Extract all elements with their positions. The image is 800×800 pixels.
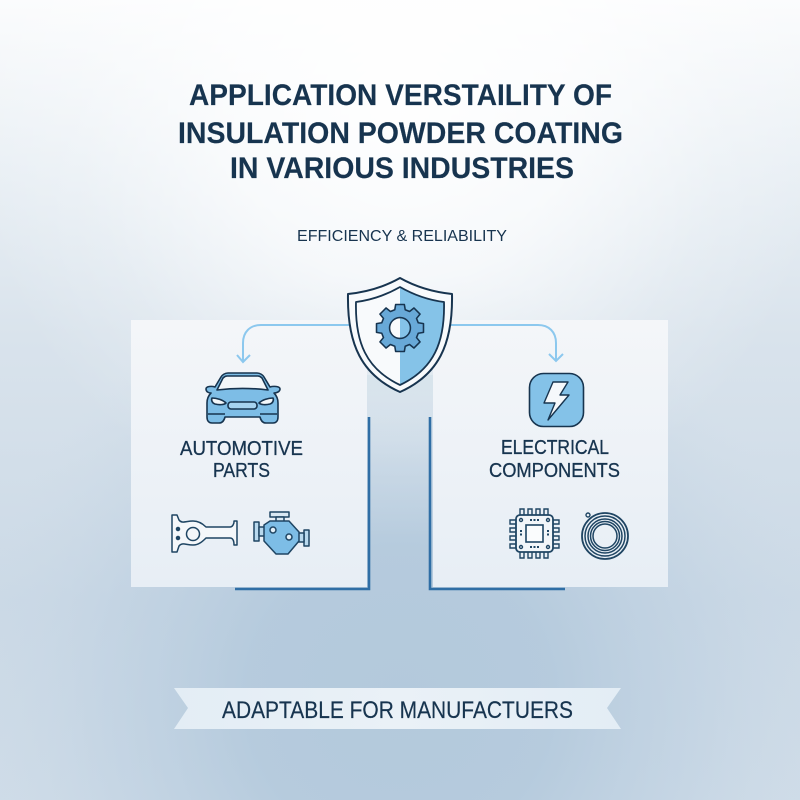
- icon: engine: [254, 512, 309, 554]
- panel: automotive parts: [131, 320, 369, 589]
- icon: car: [206, 373, 280, 423]
- arrow: shield to electrical: [450, 325, 563, 361]
- label: automotive parts: PARTS: [213, 460, 270, 482]
- border: electrical panel: [430, 417, 565, 589]
- panel: electrical components: [430, 320, 668, 589]
- icon: bracket part: [172, 515, 237, 552]
- gear: [377, 305, 423, 351]
- label: automotive parts: [180, 438, 303, 482]
- icon: microchip: [510, 509, 559, 558]
- icon: wire coil: [582, 513, 628, 559]
- icon: lightning bolt: [530, 374, 584, 426]
- label: electrical components: COMPONENTS: [489, 460, 620, 482]
- title: APPLICATION VERSTAILITY OF: [189, 79, 612, 112]
- banner: [174, 688, 621, 729]
- arrow: shield to automotive: [237, 325, 350, 362]
- title: [178, 79, 623, 185]
- icon: shield with gear: [348, 278, 452, 392]
- border: automotive panel: [235, 417, 369, 589]
- label: automotive parts: AUTOMOTIVE: [180, 438, 303, 460]
- label: electrical components: [489, 437, 620, 482]
- title: IN VARIOUS INDUSTRIES: [230, 152, 574, 185]
- title: INSULATION POWDER COATING: [178, 117, 623, 150]
- subtitle: EFFICIENCY & RELIABILITY: [297, 228, 507, 245]
- banner text: ADAPTABLE FOR MANUFACTUERS: [222, 697, 573, 724]
- center strip below shield: [367, 375, 433, 465]
- label: electrical components: ELECTRICAL: [501, 437, 609, 459]
